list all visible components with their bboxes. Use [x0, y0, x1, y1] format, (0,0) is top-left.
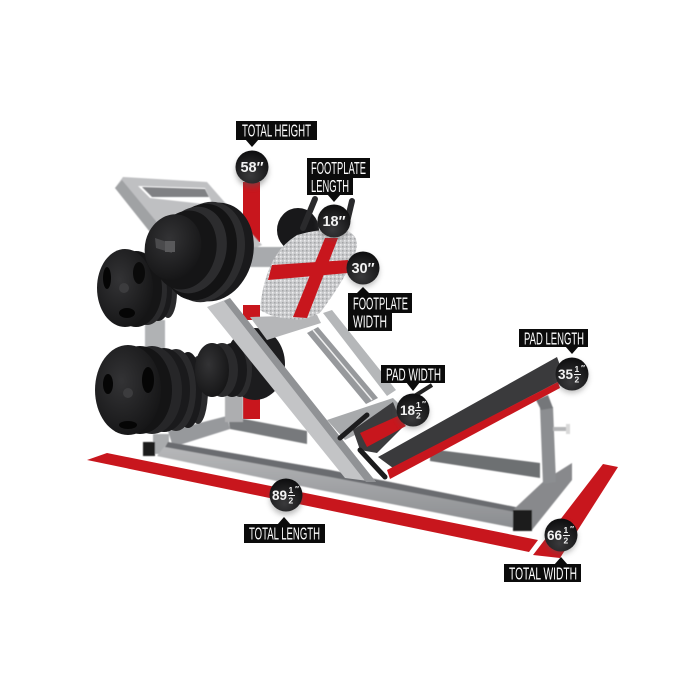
weight plates: middle stack: [97, 249, 177, 327]
floor strip: total length: [87, 453, 538, 552]
label: pad width: [381, 364, 445, 391]
footplate bracket: [250, 315, 321, 340]
bench support post: [536, 395, 570, 484]
label: total width: [504, 557, 581, 584]
badge: 66 1/2 inch: ″: [570, 524, 574, 534]
badge: 18 1/2 inch: [396, 394, 430, 429]
badge: 18 1/2 inch: ″: [422, 399, 426, 409]
label: total height: TOTAL HEIGHT: [242, 120, 311, 140]
label: pad length: [519, 328, 588, 354]
badge: 89 1/2 inch: 1: [288, 485, 294, 495]
badge: 18 inch: 18″: [322, 214, 346, 230]
badge: 89 1/2 inch: [270, 478, 302, 515]
weight plates: loaded on carriage: [137, 193, 265, 311]
badge: 35 1/2 inch: 35: [558, 367, 574, 382]
badge: 66 1/2 inch: 66: [547, 528, 563, 543]
short back pad with red strip: [327, 385, 432, 477]
label: total width: TOTAL WIDTH: [509, 564, 577, 584]
badge: 18 1/2 inch: 18: [400, 403, 416, 418]
badge: 18 inch: [318, 204, 350, 240]
footplate with red cross: [260, 230, 357, 320]
footplate handles: [303, 199, 352, 228]
weight plates: lower stack: [95, 345, 208, 435]
machine base frame: [143, 320, 572, 531]
badge: 89 1/2 inch: 89: [272, 488, 287, 503]
badge: 66 1/2 inch: 1: [564, 525, 568, 535]
label: footplate width: WIDTH: [353, 312, 387, 332]
label: total length: TOTAL LENGTH: [249, 524, 320, 544]
badge: 89 1/2 inch: ″: [295, 484, 299, 494]
badge: 35 1/2 inch: 1: [574, 364, 580, 374]
badge: 66 1/2 inch: 2: [564, 536, 568, 546]
label: footplate length: FOOTPLATE: [311, 158, 366, 178]
badge: 66 1/2 inch: [544, 518, 578, 554]
label: footplate width: FOOTPLATE: [353, 294, 408, 314]
label: pad length: PAD LENGTH: [524, 328, 584, 348]
black rear foot: [143, 442, 155, 456]
floor strip: total width: [533, 464, 618, 558]
label: footplate length: [307, 158, 370, 202]
label: footplate length: LENGTH: [311, 176, 349, 196]
label: total length: [244, 517, 325, 544]
badge: 18 1/2 inch: 2: [416, 410, 421, 420]
badge: 58 inch: [236, 150, 268, 187]
sled rails: [307, 310, 396, 404]
badge: 35 1/2 inch: ″: [581, 363, 585, 373]
black front foot: [513, 510, 532, 531]
badge: 35 1/2 inch: [556, 358, 588, 393]
long bench pad with red strip: [378, 357, 561, 479]
vertical red height strip: [243, 182, 260, 419]
badge: 35 1/2 inch: 2: [574, 374, 580, 384]
badge: 30 inch: 30″: [351, 261, 375, 277]
back plates behind footplate: [277, 208, 319, 252]
badge: 58 inch: 58″: [240, 160, 264, 176]
badge: 30 inch: [346, 252, 380, 287]
label: total height: [236, 120, 317, 147]
badge: 89 1/2 inch: 2: [288, 496, 294, 506]
main diagonal beam: [207, 298, 376, 482]
top carriage frame: [115, 177, 300, 267]
weight plates: rear stack: [195, 328, 285, 400]
label: pad width: PAD WIDTH: [386, 364, 441, 384]
badge: 18 1/2 inch: 1: [416, 400, 421, 410]
label: footplate width: [348, 287, 412, 332]
